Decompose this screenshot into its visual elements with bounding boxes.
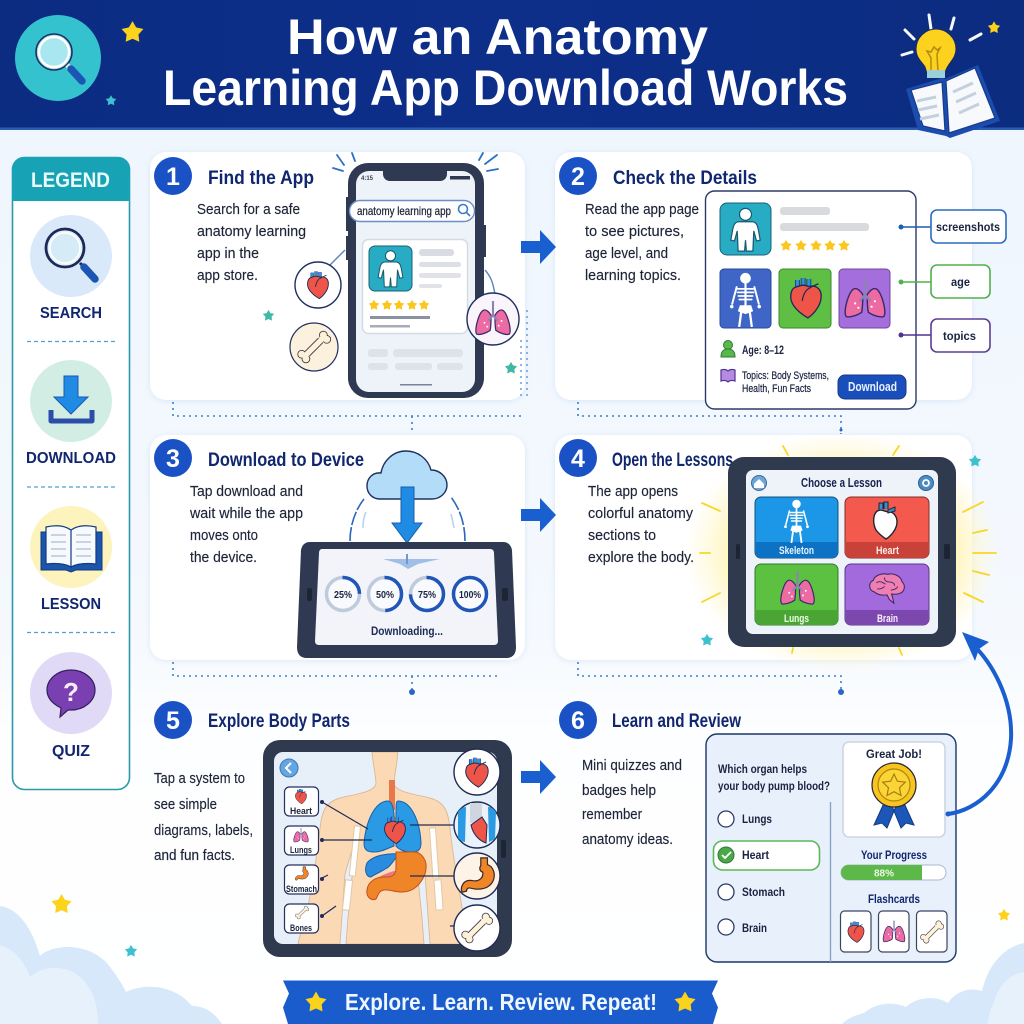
step 5 text: diagrams, labels, xyxy=(154,822,253,839)
label: bones: Bones xyxy=(290,923,312,934)
step 6 text: badges help xyxy=(582,782,656,799)
lesson tile: skeleton xyxy=(755,497,838,558)
arrow: step 1 to 2 xyxy=(521,230,556,264)
step 2 text: age level, and xyxy=(585,245,668,262)
icon: body explorer tablet xyxy=(263,740,512,957)
icon: lesson tablet xyxy=(728,457,956,647)
age row xyxy=(721,340,784,357)
legend item: quiz xyxy=(30,652,112,760)
body diagram xyxy=(298,752,472,944)
legend item: download: DOWNLOAD xyxy=(26,450,116,467)
legend header xyxy=(12,157,130,201)
icon: phone with search xyxy=(333,153,498,398)
step 3 text: moves onto xyxy=(190,527,258,544)
step 3 heading: Download to Device xyxy=(208,450,364,471)
step 1 text: app in the xyxy=(197,245,259,262)
progress bar: Your Progress xyxy=(861,848,927,862)
step 1 text: Search for a safe xyxy=(197,201,300,218)
lesson tile: lungs: Lungs xyxy=(784,613,809,625)
icon: bone circle xyxy=(290,323,338,371)
lesson tile: heart xyxy=(845,497,929,558)
step 1 text xyxy=(197,201,306,284)
answer: brain: Brain xyxy=(742,921,767,935)
lesson tile: heart: Heart xyxy=(876,545,899,557)
legend item: search xyxy=(30,215,112,322)
step 2 heading: 2 xyxy=(571,163,585,191)
step 1 heading xyxy=(154,157,314,195)
lesson tile: brain: Brain xyxy=(877,613,898,625)
background clouds right xyxy=(842,943,1024,1024)
icon: tablet with download progress: Downloading... xyxy=(371,624,443,638)
step 5 text: Tap a system to xyxy=(154,770,245,787)
step 6 text: remember xyxy=(582,806,642,823)
callout: screenshots xyxy=(898,210,1006,243)
step 3 heading: 3 xyxy=(166,445,180,473)
step 6 heading xyxy=(559,701,741,739)
step 6 heading: Learn and Review xyxy=(612,711,741,732)
tile: heart xyxy=(779,269,831,328)
label: stomach xyxy=(284,865,324,895)
icon: teal star right step 1 xyxy=(505,362,517,373)
step 5 heading xyxy=(154,701,350,739)
yellow glow behind lesson tablet xyxy=(684,432,1000,672)
search bar: anatomy learning app xyxy=(357,204,451,218)
step 6 text: anatomy ideas. xyxy=(582,831,673,848)
arrow: step 5 to 6 xyxy=(521,760,556,794)
icon: header magnifier xyxy=(15,15,101,101)
progress ring 25%: 25% xyxy=(334,590,352,601)
banner: footer slogan: Explore. Learn. Review. Repeat! xyxy=(345,989,657,1015)
step 4 text xyxy=(588,483,694,566)
progress bar: 88% xyxy=(874,868,894,880)
lesson tile: lungs xyxy=(755,564,838,625)
step 4 heading: 4 xyxy=(571,445,585,473)
topics row xyxy=(721,369,829,395)
step 6 heading: 6 xyxy=(571,707,585,735)
quiz question: your body pump blood? xyxy=(718,781,830,793)
label: lungs: Lungs xyxy=(290,845,312,856)
zoom circle: heart xyxy=(454,749,500,795)
background clouds left xyxy=(0,906,222,1024)
legend item: lesson: LESSON xyxy=(41,596,101,613)
app details card xyxy=(706,191,916,409)
title: How an Anatomy xyxy=(287,9,708,65)
back button xyxy=(280,759,298,777)
flashcard: lungs xyxy=(878,911,909,952)
badge: great job xyxy=(843,742,945,837)
tile: skeleton xyxy=(720,269,771,328)
answer: brain xyxy=(718,919,767,935)
progress ring 100% xyxy=(454,578,486,610)
title xyxy=(163,9,848,116)
step 4 text: explore the body. xyxy=(588,549,694,566)
search bar xyxy=(350,200,474,222)
label: bones xyxy=(284,904,324,934)
progress ring 50% xyxy=(368,578,402,610)
label: heart xyxy=(284,787,324,817)
topics row: Topics: Body Systems, xyxy=(742,370,829,382)
step 6 text: Mini quizzes and xyxy=(582,757,682,774)
decorative stars bottom xyxy=(51,894,1010,956)
panel: step 3 card xyxy=(150,435,525,660)
icon: header star teal xyxy=(106,95,116,105)
step 2 text: to see pictures, xyxy=(585,223,684,240)
legend header: LEGEND xyxy=(31,169,110,192)
home button xyxy=(752,476,766,490)
step 5 text: see simple xyxy=(154,796,217,813)
callout: topics: topics xyxy=(943,329,976,343)
step 3 text xyxy=(189,483,303,566)
header band xyxy=(0,0,1024,130)
step 5 text: and fun facts. xyxy=(154,847,235,864)
flashcards xyxy=(840,892,947,952)
icon: header star right xyxy=(988,21,1000,33)
step 1 heading: Find the App xyxy=(208,168,314,189)
step 3 text: wait while the app xyxy=(189,505,303,522)
step 5 heading: 5 xyxy=(166,707,180,735)
answer: lungs: Lungs xyxy=(742,812,772,826)
callout: age xyxy=(898,265,990,298)
icon: lungs circle xyxy=(467,270,519,345)
panel: legend xyxy=(12,157,130,790)
dotted connector: 3 to 5 xyxy=(173,662,498,695)
lesson tile: skeleton: Skeleton xyxy=(779,545,814,557)
zoom circle: stomach xyxy=(454,853,500,899)
app listing card xyxy=(362,240,468,334)
lesson tile: brain xyxy=(845,564,929,625)
step 3 text: the device. xyxy=(190,549,257,566)
legend item: download xyxy=(26,360,116,467)
quiz question xyxy=(718,764,830,793)
icon: header star yellow xyxy=(122,21,143,42)
light rays around tablet xyxy=(700,446,996,655)
step 2 text xyxy=(585,201,699,284)
step 5 text xyxy=(154,770,253,864)
topics row: Health, Fun Facts xyxy=(742,383,811,395)
tile: lungs xyxy=(839,269,890,328)
answer: lungs xyxy=(718,811,772,827)
settings button xyxy=(918,476,934,490)
progress ring 75% xyxy=(410,578,444,610)
legend item: search: SEARCH xyxy=(40,305,102,322)
icon: light bulb and open book xyxy=(902,15,1000,138)
step 5 heading: Explore Body Parts xyxy=(208,711,350,732)
panel: step 2 card xyxy=(555,152,972,400)
legend item: quiz: QUIZ xyxy=(52,743,90,760)
icon: lesson tablet: Choose a Lesson xyxy=(801,476,882,490)
step 2 heading: Check the Details xyxy=(613,168,757,189)
step 3 heading xyxy=(154,439,364,477)
icon: phone with search: 4:15 xyxy=(361,176,374,182)
step 4 text: sections to xyxy=(588,527,656,544)
label: lungs xyxy=(284,826,324,856)
zoom circle: bone xyxy=(454,905,500,951)
flashcard: bone xyxy=(916,911,947,952)
title: Learning App Download Works xyxy=(163,60,848,116)
icon: tablet with download progress xyxy=(297,542,516,658)
quiz question: Which organ helps xyxy=(718,764,807,776)
step 4 heading: Open the Lessons xyxy=(612,450,733,471)
callout: age: age xyxy=(951,275,970,289)
panel: step 1 card xyxy=(150,152,525,400)
icon: teal star left of tablet xyxy=(701,634,713,645)
step 4 text: The app opens xyxy=(588,483,678,500)
legend item: lesson xyxy=(30,506,112,613)
answer: stomach: Stomach xyxy=(742,885,785,899)
label: stomach: Stomach xyxy=(286,884,317,895)
icon: teal star right of tablet xyxy=(969,455,981,466)
step 4 heading xyxy=(559,439,733,477)
download button: Download xyxy=(848,380,897,394)
label: heart: Heart xyxy=(290,806,313,817)
step 2 text: Read the app page xyxy=(585,201,699,218)
callout: topics xyxy=(898,319,990,352)
step 4 text: colorful anatomy xyxy=(588,505,693,522)
answer: heart selected: Heart xyxy=(742,848,769,862)
flashcards: Flashcards xyxy=(868,892,920,906)
dotted connector: 2 to 4 xyxy=(578,402,842,434)
flashcard: heart xyxy=(840,911,871,952)
dotted connector: 1 to 3 xyxy=(173,310,527,434)
progress ring 100%: 100% xyxy=(459,590,481,601)
answer: stomach xyxy=(718,884,785,900)
quiz and progress card xyxy=(706,734,956,962)
banner: footer slogan xyxy=(283,980,718,1024)
badge: great job: Great Job! xyxy=(866,747,922,761)
step 1 text: app store. xyxy=(197,267,258,284)
step 6 text xyxy=(582,757,682,848)
step 3 text: Tap download and xyxy=(190,483,303,500)
step 1 text: anatomy learning xyxy=(197,223,306,240)
dotted connector: 4 to 6 xyxy=(578,662,844,695)
arrow: step 3 to 4 xyxy=(521,498,556,532)
zoom circle: lungs xyxy=(454,802,500,848)
legend item: quiz: ? xyxy=(63,677,79,707)
connector lines xyxy=(322,802,466,926)
step 2 text: learning topics. xyxy=(585,267,681,284)
step 2 heading xyxy=(559,157,757,195)
arrow: loop back from review to lessons xyxy=(946,632,1011,816)
panel: step 4 card xyxy=(555,435,972,660)
step 1 heading: 1 xyxy=(166,163,180,191)
progress ring 50%: 50% xyxy=(376,590,394,601)
callout: screenshots: screenshots xyxy=(936,220,1000,234)
download button xyxy=(838,375,906,399)
answer: heart selected xyxy=(714,841,820,870)
progress bar xyxy=(841,848,946,880)
progress ring 75%: 75% xyxy=(418,590,436,601)
progress ring 25% xyxy=(326,578,360,610)
age row: Age: 8–12 xyxy=(742,343,784,357)
icon: heart circle xyxy=(295,250,345,308)
icon: teal star step 1 xyxy=(263,310,274,321)
icon: cloud with download arrow xyxy=(350,451,465,543)
